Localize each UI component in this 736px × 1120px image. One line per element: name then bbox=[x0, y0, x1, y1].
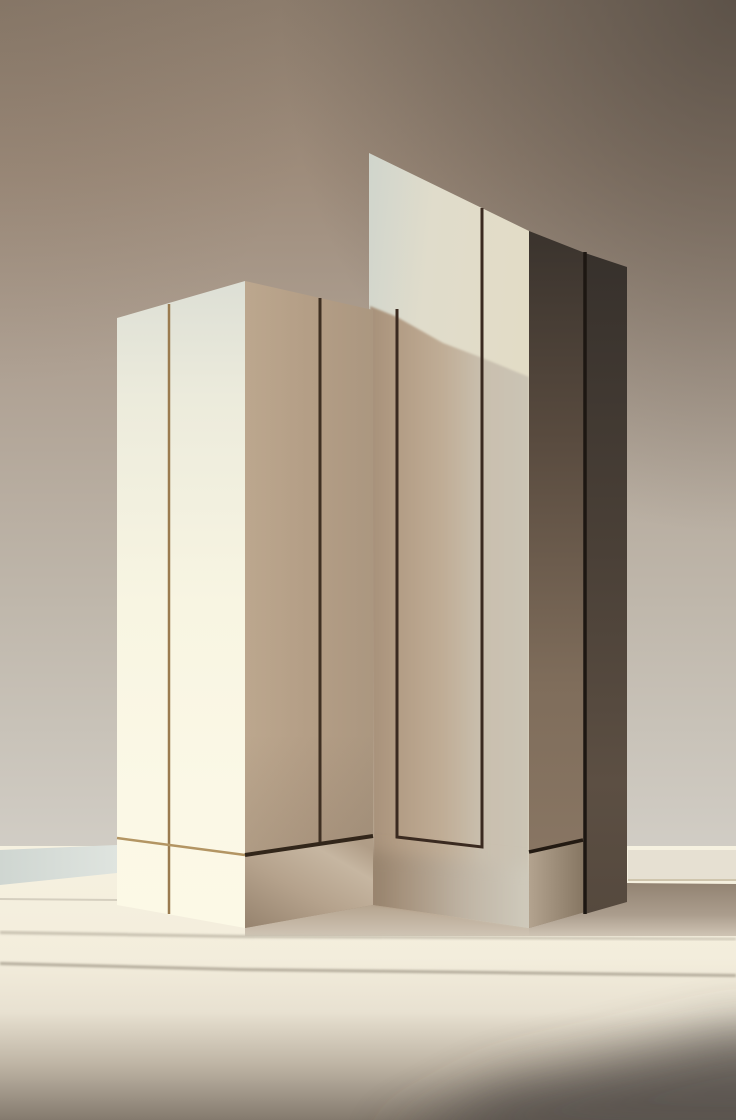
tall back panel bbox=[369, 153, 529, 928]
dark side faces bbox=[529, 231, 627, 928]
background wall bbox=[0, 0, 736, 860]
left front block: lit face bbox=[117, 281, 245, 928]
groove lines bbox=[117, 208, 585, 914]
shadow on tall panel bbox=[370, 306, 529, 928]
left front block: shaded face bbox=[245, 281, 373, 928]
floor bbox=[0, 845, 736, 1120]
